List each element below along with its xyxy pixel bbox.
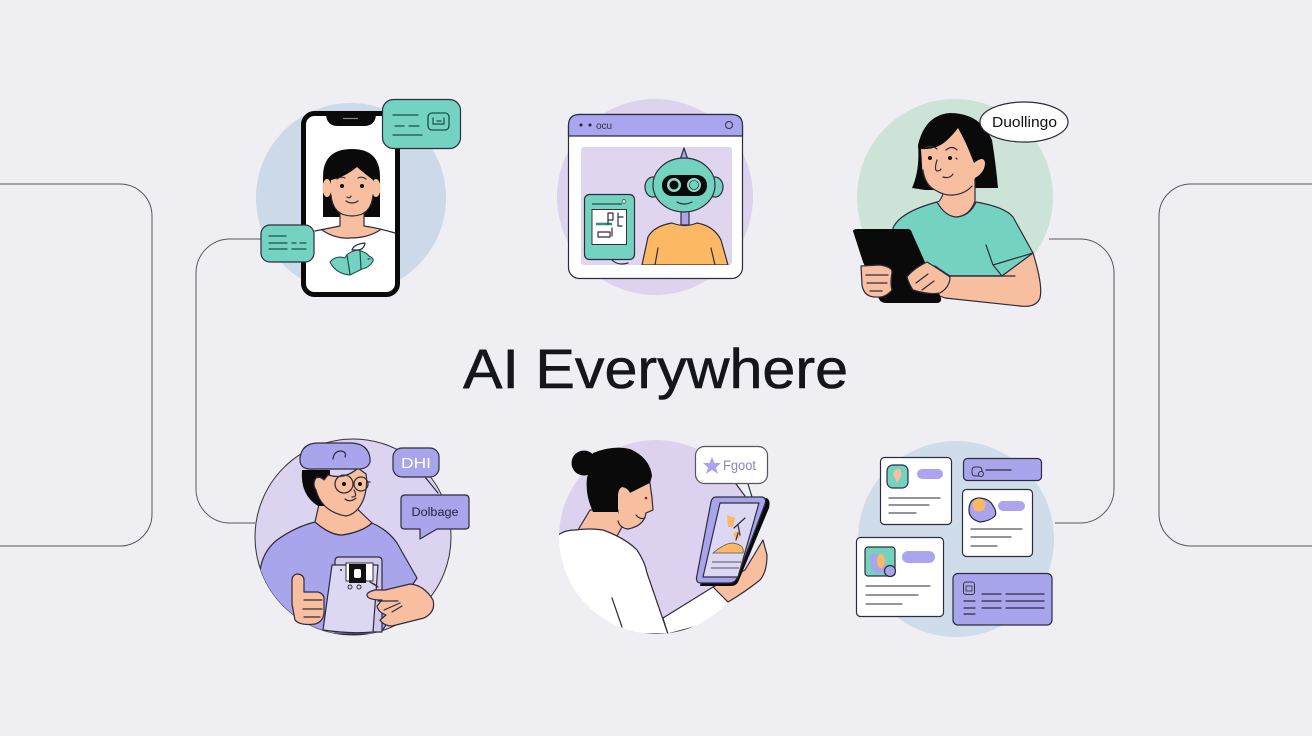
browser window: ocu	[596, 121, 612, 132]
card 1	[880, 458, 952, 524]
person on phone	[315, 149, 395, 238]
chat bubble: DHI: DHI	[401, 455, 431, 472]
connector lines and side frames	[0, 184, 1312, 546]
browser window	[568, 114, 742, 278]
teal shirt	[893, 202, 1033, 276]
woman's head	[572, 448, 653, 529]
hand behind tablet	[713, 540, 767, 602]
purple shirt	[260, 522, 417, 634]
chat bubble left	[261, 225, 314, 262]
man's head	[302, 468, 370, 516]
purple hat	[300, 443, 370, 469]
chat bubble top	[382, 100, 460, 148]
white jacket	[558, 529, 736, 634]
phone	[304, 112, 398, 294]
neck	[314, 506, 372, 536]
card 4	[953, 574, 1052, 625]
speech bubble: Duollingo	[980, 102, 1068, 142]
badge card	[964, 458, 1042, 480]
illustration: profile cards	[856, 441, 1054, 637]
card 2	[962, 490, 1032, 556]
fish icon on shirt	[330, 243, 373, 275]
chat bubble: Doloage: Dolbage	[412, 507, 458, 519]
illustration: woman with tablet and Duolingo bubble	[853, 99, 1068, 306]
rounded callout: Fgoot	[696, 446, 768, 497]
title: AI Everywhere	[463, 337, 848, 400]
illustration: AI robot in browser window	[557, 99, 753, 295]
hands	[292, 574, 434, 626]
chat bubble: DHI	[393, 448, 439, 493]
scanner phone	[323, 557, 382, 633]
card 3	[856, 538, 944, 616]
black tablet	[853, 229, 941, 303]
robot tablet	[584, 194, 634, 264]
arm	[900, 253, 1041, 306]
illustration: woman reading tablet	[558, 440, 770, 634]
robot	[642, 148, 728, 265]
neck and face	[921, 128, 985, 217]
woman's neck	[578, 510, 622, 536]
hands	[861, 262, 950, 297]
rounded callout: Fgoot: Fgoot	[723, 457, 756, 473]
speech bubble: Duollingo: Duollingo	[992, 115, 1057, 131]
woman's hair	[912, 113, 998, 190]
illustration: man with glasses scanning phone	[255, 439, 469, 635]
tablet with image	[696, 497, 770, 586]
chat bubble: Doloage	[401, 495, 469, 539]
illustration: phone video chat	[256, 100, 460, 294]
